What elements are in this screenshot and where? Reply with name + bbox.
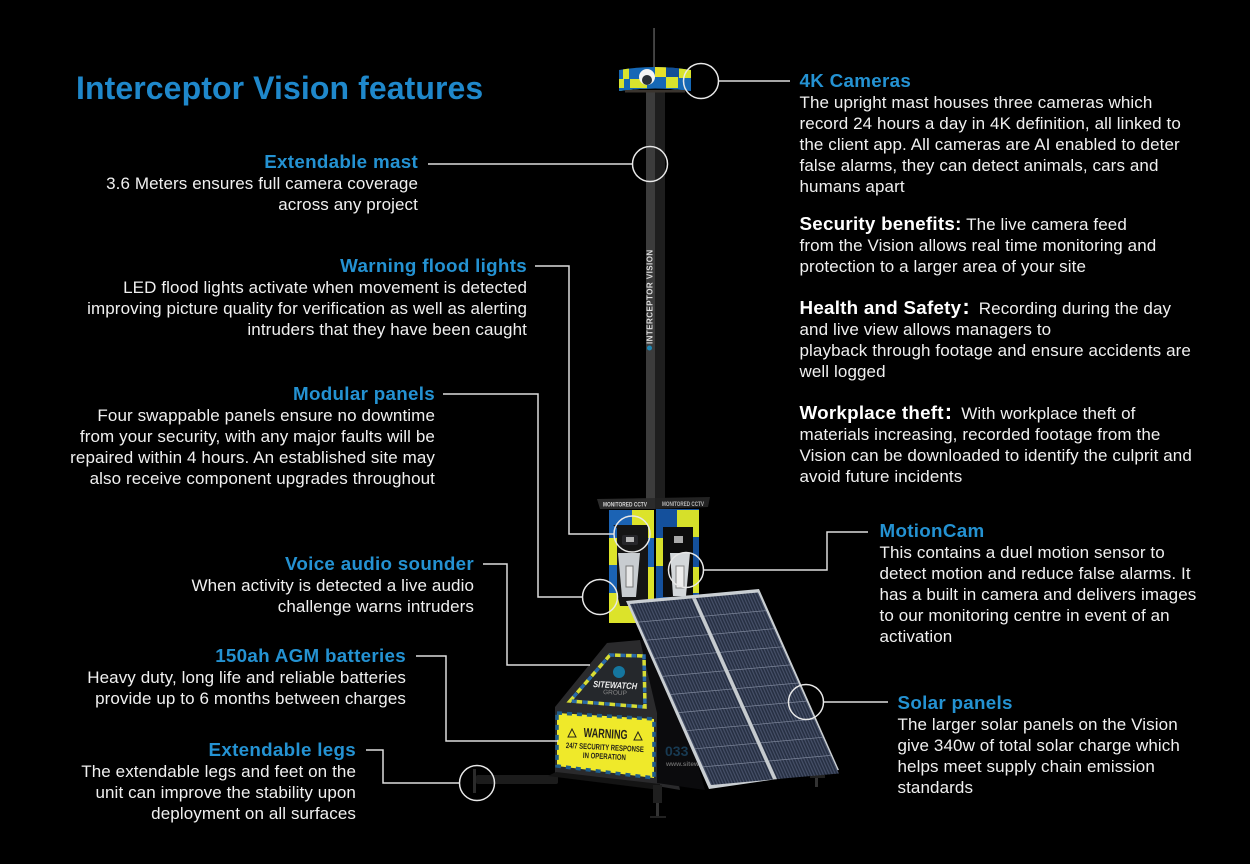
callout connector lines bbox=[366, 81, 888, 783]
callout: Voice audio sounder: When activity is detected a live audio bbox=[191, 576, 474, 595]
callout: Extendable legs: Extendable legs bbox=[208, 739, 356, 760]
callout: 4K Cameras: The upright mast houses three cameras which bbox=[800, 93, 1152, 112]
text block: Health and Safety: playback through footage and ensure accidents are bbox=[800, 341, 1191, 360]
callout: Modular panels bbox=[70, 383, 435, 488]
text block: Workplace theft: avoid future incidents bbox=[800, 467, 962, 486]
text block: Health and Safety: Health and Safety: Recording during the day bbox=[800, 294, 1171, 319]
callout: Warning flood lights bbox=[87, 255, 527, 339]
mast bbox=[646, 90, 665, 502]
callout: 4K Cameras: humans apart bbox=[800, 177, 905, 196]
base housing bbox=[555, 640, 712, 790]
callout: Modular panels: repaired within 4 hours. An established site may bbox=[70, 448, 435, 467]
callout: 150ah AGM batteries bbox=[87, 645, 406, 708]
modular panel left bbox=[609, 510, 654, 623]
callout: 150ah AGM batteries: provide up to 6 months between charges bbox=[95, 689, 406, 708]
solar panel rear bbox=[810, 775, 825, 778]
callout: MotionCam bbox=[880, 520, 1196, 646]
callout: 4K Cameras: the client app. All cameras are AI enabled to deter bbox=[800, 135, 1180, 154]
callout: MotionCam: has a built in camera and delivers images bbox=[880, 584, 1196, 604]
callout: Extendable legs: The extendable legs and feet on the bbox=[81, 762, 356, 781]
callout: 150ah AGM batteries: 150ah AGM batteries bbox=[215, 645, 406, 666]
text block: Security benefits: from the Vision allows real time monitoring and bbox=[800, 236, 1156, 254]
text block: Workplace theft: Workplace theft: With workplace theft of bbox=[800, 399, 1135, 424]
callout: Modular panels: also receive component upgrades throughout bbox=[90, 469, 435, 488]
base housing: www.sitewatch bbox=[665, 761, 712, 768]
callout: Solar panels: Solar panels bbox=[898, 692, 1013, 712]
callout: 150ah AGM batteries: Heavy duty, long life and reliable batteries bbox=[87, 668, 406, 687]
text block: Workplace theft: materials increasing, recorded footage from the bbox=[800, 425, 1160, 444]
monitored CCTV header band bbox=[597, 497, 710, 509]
callout: Modular panels: Four swappable panels ensure no downtime bbox=[97, 406, 435, 425]
callout: MotionCam: MotionCam bbox=[880, 520, 984, 540]
modular panel right bbox=[656, 509, 699, 598]
text block: Security benefits bbox=[800, 212, 1156, 276]
callout: MotionCam: This contains a duel motion sensor to bbox=[880, 542, 1165, 562]
callout: Voice audio sounder: Voice audio sounder bbox=[285, 553, 474, 574]
text block: Workplace theft: Vision can be downloaded to identify the culprit and bbox=[800, 446, 1192, 465]
callout: Extendable legs: deployment on all surfaces bbox=[151, 804, 356, 823]
solar panels bbox=[626, 589, 839, 789]
monitored CCTV header band: MONITORED CCTV bbox=[603, 502, 647, 508]
callout: Extendable mast: across any project bbox=[278, 195, 418, 214]
extendable legs bbox=[473, 769, 818, 818]
callout: Extendable mast: Extendable mast bbox=[264, 151, 418, 172]
warning plate: 24/7 SECURITY RESPONSE bbox=[566, 741, 645, 754]
callout: Solar panels bbox=[898, 692, 1180, 796]
side phone number: 033 bbox=[665, 743, 689, 759]
monitored CCTV header band: MONITORED CCTV bbox=[662, 502, 704, 508]
callout: Solar panels: The larger solar panels on the Vision bbox=[898, 714, 1178, 734]
callout: Voice audio sounder: challenge warns intruders bbox=[278, 597, 474, 616]
text block: Health and Safety bbox=[800, 294, 1191, 381]
callout: Extendable mast bbox=[106, 151, 418, 214]
camera head bbox=[619, 67, 691, 92]
callout: Solar panels: standards bbox=[898, 778, 973, 796]
callout marker circles bbox=[460, 64, 824, 800]
callout: Solar panels: give 340w of total solar charge which bbox=[898, 736, 1180, 754]
callout: Solar panels: helps meet supply chain emission bbox=[898, 756, 1155, 776]
callout: Modular panels: Modular panels bbox=[293, 383, 435, 404]
text block: Security benefits: protection to a larger area of your site bbox=[800, 256, 1086, 276]
logo plate bbox=[570, 655, 645, 707]
warning plate bbox=[557, 713, 654, 778]
illustration: Interceptor Vision tower unit bbox=[366, 28, 888, 818]
callout: Voice audio sounder bbox=[191, 553, 474, 616]
mast lettering: INTERCEPTOR VISION bbox=[646, 249, 654, 344]
callout: 4K Cameras: record 24 hours a day in 4K definition, all linked to bbox=[800, 114, 1181, 133]
callout: Warning flood lights: LED flood lights activate when movement is detected bbox=[123, 278, 527, 297]
text block: Security benefits: Security benefits: The live camera feed bbox=[800, 212, 1127, 234]
callout: 4K Cameras: 4K Cameras bbox=[800, 70, 911, 91]
logo plate: SITEWATCH bbox=[593, 679, 638, 691]
callout: MotionCam: activation bbox=[880, 626, 952, 646]
text block: Workplace theft bbox=[800, 399, 1192, 486]
callout: Warning flood lights: intruders that they have been caught bbox=[247, 320, 527, 339]
callout: Extendable legs: unit can improve the stability upon bbox=[95, 783, 356, 802]
text block: Health and Safety: well logged bbox=[800, 362, 886, 381]
callout: Extendable mast: 3.6 Meters ensures full camera coverage bbox=[106, 174, 418, 193]
warning plate: WARNING bbox=[583, 725, 628, 742]
title: Interceptor Vision features bbox=[76, 70, 483, 106]
text block: Health and Safety: and live view allows managers to bbox=[800, 320, 1051, 339]
callout: Extendable legs bbox=[81, 739, 356, 823]
callout: Warning flood lights: Warning flood lights bbox=[340, 255, 527, 276]
callout: 4K Cameras bbox=[800, 70, 1181, 196]
callout: 4K Cameras: false alarms, they can detect animals, cars and bbox=[800, 156, 1159, 175]
warning plate: IN OPERATION bbox=[583, 751, 626, 762]
antenna bbox=[653, 28, 655, 68]
callout: Modular panels: from your security, with any major faults will be bbox=[80, 427, 435, 446]
callout: Warning flood lights: improving picture quality for verification as well as alerting bbox=[87, 299, 527, 318]
logo plate: GROUP bbox=[603, 689, 627, 697]
callout: MotionCam: detect motion and reduce false alarms. It bbox=[880, 564, 1191, 582]
callout: MotionCam: to our monitoring centre in event of an bbox=[880, 606, 1170, 624]
